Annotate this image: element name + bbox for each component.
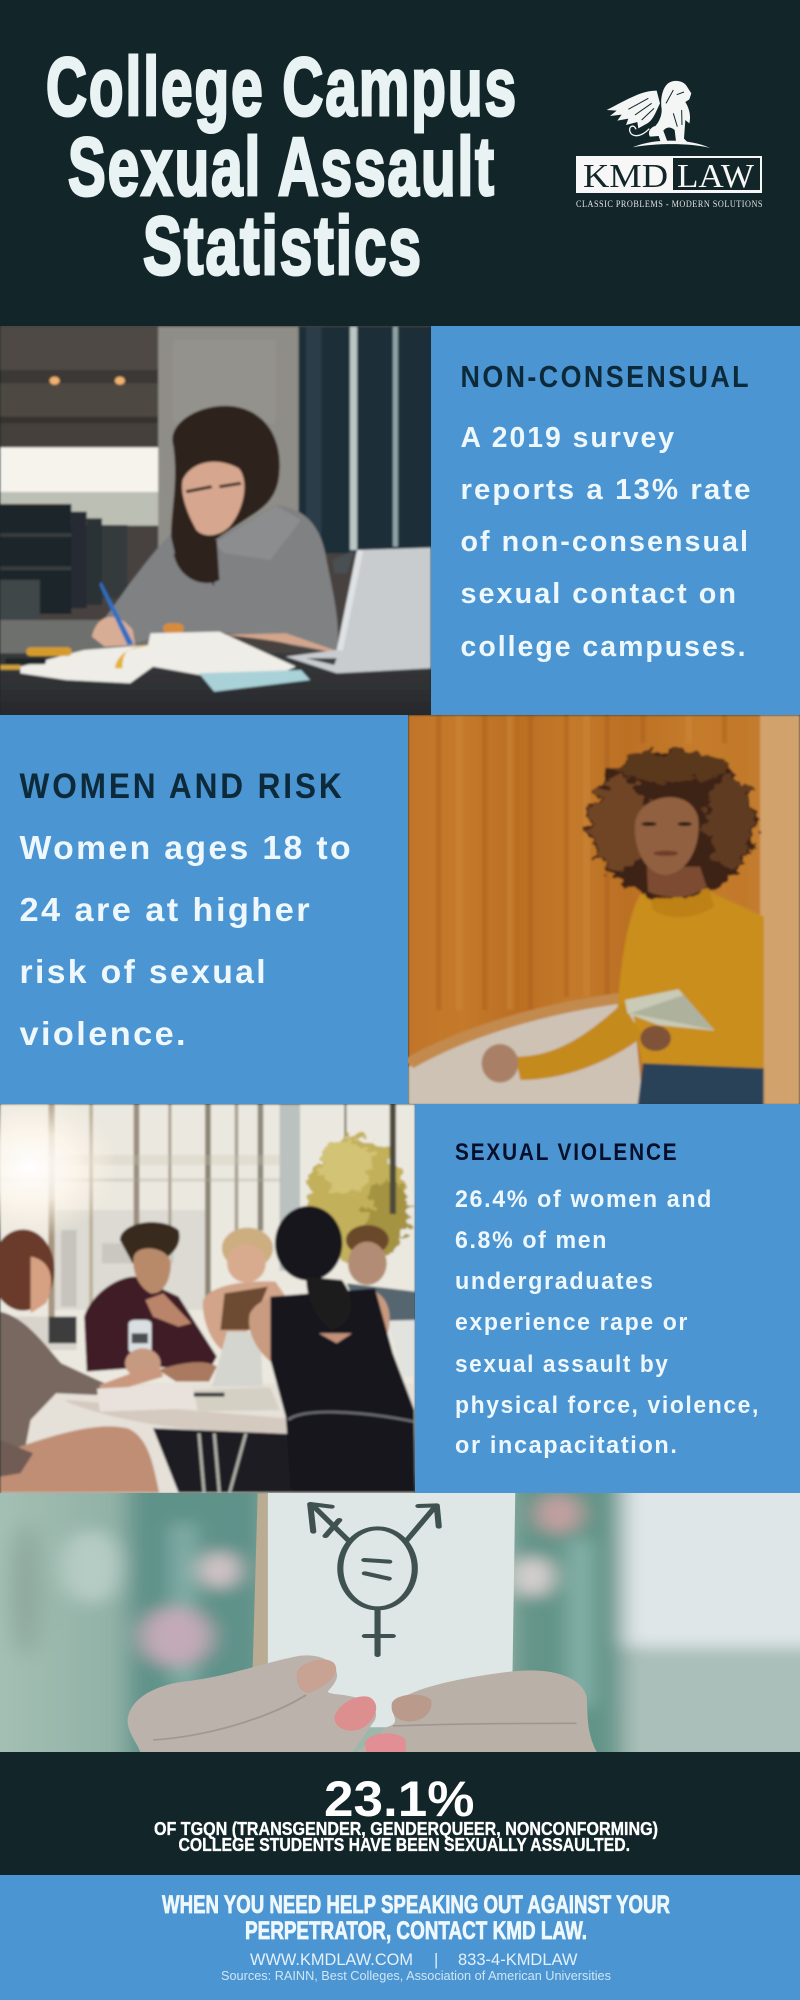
- body: non-consensual: [460, 422, 752, 663]
- body: sexual violence: sexual assault by: [455, 1351, 670, 1378]
- body: women and risk: Women ages 18 to: [20, 829, 353, 866]
- body: sexual violence: 26.4% of women and: [455, 1186, 713, 1213]
- body: non-consensual: of non-consensual: [460, 526, 750, 558]
- icon: hands holding card: [128, 1655, 597, 1752]
- body: non-consensual: reports a 13% rate: [460, 474, 752, 506]
- logo wordmark box: [576, 156, 762, 195]
- logo wordmark box: LAW: [677, 158, 755, 195]
- logo: KMD Law: [576, 81, 763, 209]
- body: women and risk: violence.: [20, 1015, 188, 1052]
- heading: sexual violence: SEXUAL VIOLENCE: [455, 1139, 678, 1166]
- photo: student writing in library: [0, 320, 431, 720]
- body: sexual violence: undergraduates: [455, 1268, 654, 1295]
- big number: 23.1%: 23.1%: [324, 1771, 474, 1827]
- title: College Campus: [46, 40, 518, 133]
- title: Sexual Assault: [68, 120, 496, 213]
- statistic description: OF TGQN (TRANSGENDER, GENDERQUEER, NONCONFORMING): [154, 1819, 658, 1839]
- photo: students at a table: [0, 1093, 415, 1494]
- body: women and risk: [20, 829, 353, 1052]
- call to action heading: [162, 1891, 670, 1945]
- title: [46, 40, 518, 292]
- panel: women and risk: [0, 715, 800, 1105]
- icon: transgender symbol: [310, 1504, 439, 1655]
- panel: TGQN statistic: [0, 1752, 800, 1875]
- photo: hands holding transgender symbol card: [0, 1493, 800, 1752]
- panel: call to action footer: [0, 1875, 800, 2000]
- body: sexual violence: or incapacitation.: [455, 1432, 678, 1459]
- panel: header: [0, 0, 800, 326]
- body: non-consensual: sexual contact on: [460, 578, 738, 610]
- statistic description: [154, 1819, 658, 1855]
- title: Statistics: [143, 199, 423, 292]
- body: sexual violence: 6.8% of men: [455, 1227, 608, 1254]
- blue text block: sexual violence: [415, 1104, 800, 1493]
- body: sexual violence: [455, 1186, 760, 1459]
- body: non-consensual: A 2019 survey: [460, 422, 676, 454]
- call to action heading: PERPETRATOR, CONTACT KMD LAW.: [245, 1917, 587, 1945]
- body: women and risk: 24 are at higher: [20, 891, 312, 928]
- sources: Sources: RAINN, Best Colleges, Association of American Universities: [221, 1968, 611, 1983]
- blue text block: women and risk: [0, 715, 408, 1104]
- panel: non-consensual: [0, 320, 800, 720]
- contact line: |: [434, 1951, 438, 1969]
- body: non-consensual: college campuses.: [460, 631, 748, 663]
- contact line: 833-4-KMDLAW: [458, 1951, 578, 1969]
- statistic description: COLLEGE STUDENTS HAVE BEEN SEXUALLY ASSAULTED.: [178, 1835, 630, 1855]
- contact line: WWW.KMDLAW.COM: [250, 1951, 413, 1969]
- blue text block: non-consensual: [431, 326, 800, 715]
- body: women and risk: risk of sexual: [20, 953, 268, 990]
- body: sexual violence: experience rape or: [455, 1309, 689, 1336]
- heading: non-consensual: NON-CONSENSUAL: [460, 359, 751, 394]
- contact line: [250, 1951, 578, 1969]
- panel: sexual violence: [0, 1093, 800, 1494]
- heading: women and risk: WOMEN AND RISK: [20, 767, 344, 806]
- logo tagline: CLASSIC PROBLEMS - MODERN SOLUTIONS: [576, 199, 763, 209]
- body: sexual violence: physical force, violence,: [455, 1392, 760, 1419]
- logo wordmark box: KMD: [583, 158, 668, 195]
- icon: griffin: [607, 81, 710, 148]
- photo: woman in mustard sweater: [408, 715, 800, 1105]
